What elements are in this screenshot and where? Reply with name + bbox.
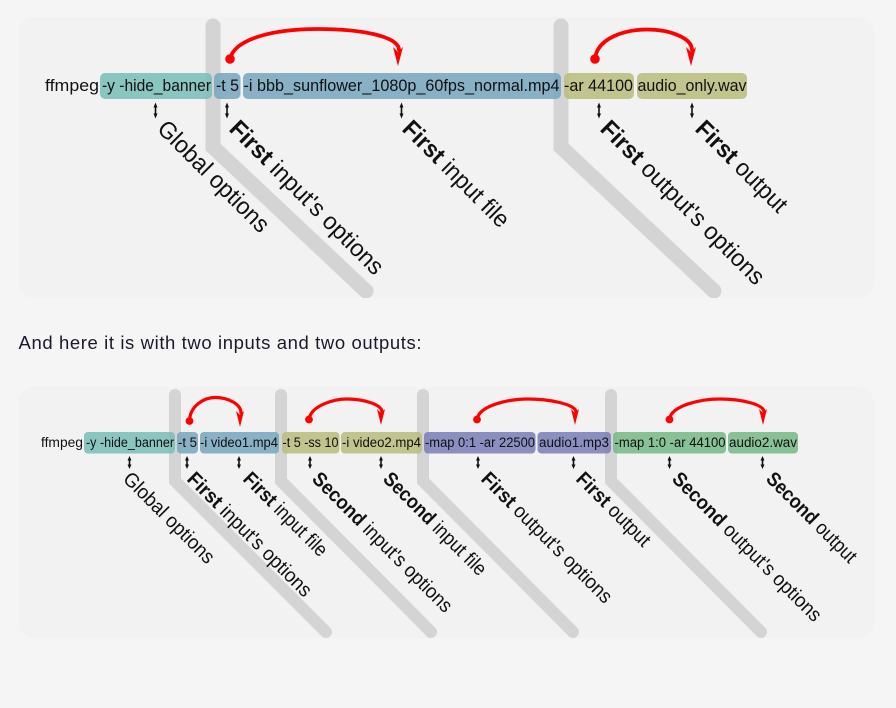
dividers: panel two separators (175, 395, 761, 632)
command chips: panel two: audio2.wav (729, 435, 797, 450)
rotated labels: panel two: First input file (238, 468, 332, 561)
command chips: panel one: -i bbb_sunflower_1080p_60fps_normal.mp4 (244, 77, 560, 95)
command chips: panel two: -t 5 (178, 435, 197, 450)
rotated labels: panel one: First output (690, 115, 793, 219)
command chips: panel one: -ar 44100 (564, 77, 633, 95)
command chips: panel two: -i video2.mp4 (342, 435, 421, 450)
command label: ffmpeg: ffmpeg (41, 435, 83, 450)
arrow: first input options apply to first input file (225, 29, 403, 66)
rotated labels: panel one: First input file (397, 115, 515, 233)
command chips: panel two (84, 432, 798, 454)
arrow: first input options to first input file (186, 398, 244, 427)
panel: single input and output diagram (45, 18, 788, 298)
pointer arrows: panel one (154, 102, 694, 118)
dividers: panel one separators (213, 26, 714, 291)
command label: ffmpeg: ffmpeg (45, 77, 99, 95)
rotated labels: panel two: First output (571, 468, 655, 552)
rotated labels: panel one: Global options (152, 115, 275, 238)
panel: two inputs and two outputs diagram (18, 387, 874, 638)
rotated labels: panel one: First input's options (224, 115, 389, 281)
rotated labels: panel one (152, 115, 793, 291)
command chips: panel one: audio_only.wav (638, 77, 747, 95)
arrow: second output options to second output (666, 399, 767, 425)
rotated labels: panel two: First output's options (476, 468, 616, 608)
rotated labels: panel two: Second input's options (307, 468, 457, 617)
command chips: panel two: audio1.mp3 (539, 435, 609, 450)
rotated labels: panel two: Second input file (378, 468, 491, 580)
rotated labels: panel two (118, 468, 861, 626)
rotated labels: panel two: Global options (118, 468, 219, 568)
command chips: panel two: -i video1.mp4 (200, 435, 278, 450)
command chips: panel one: -y -hide_banner (102, 77, 211, 95)
rotated labels: panel two: First input's options (182, 468, 316, 602)
arrow: first output options apply to first output (590, 30, 696, 66)
arrow: second input options to second input file (305, 399, 385, 425)
arrow: first output options to first output (473, 399, 579, 425)
command chips: panel one: -t 5 (216, 77, 239, 95)
rotated labels: panel one: First output's options (595, 115, 770, 291)
rotated labels: panel two: Second output's options (667, 468, 826, 626)
pointer arrows: panel two (128, 456, 764, 469)
command chips: panel two: -map 1:0 -ar 44100 (614, 435, 726, 450)
command chips: panel two: -y -hide_banner (86, 435, 174, 450)
command chips: panel one (100, 73, 747, 99)
text: intro to second diagram: And here it is with two inputs and two outputs: (18, 332, 422, 353)
rotated labels: panel two: Second output (761, 468, 861, 568)
command chips: panel two: -map 0:1 -ar 22500 (425, 435, 535, 450)
command chips: panel two: -t 5 -ss 10 (282, 435, 338, 450)
